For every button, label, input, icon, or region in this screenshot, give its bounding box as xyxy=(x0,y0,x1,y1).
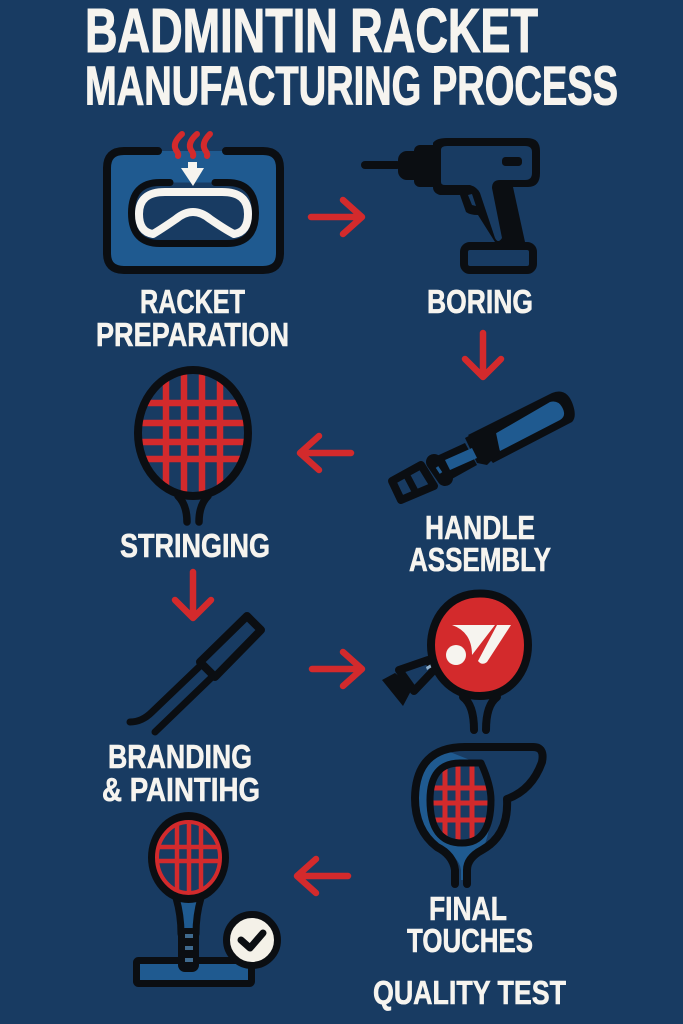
icon: power drill xyxy=(361,138,540,270)
icon: heated mould with racket frame xyxy=(107,134,280,270)
arrow: branding to red logo racket xyxy=(312,652,362,686)
arrow: preparation to boring xyxy=(311,200,362,234)
label: branding and painting xyxy=(102,738,260,808)
icon: racket handle xyxy=(392,392,575,500)
icon: racket with red logo head xyxy=(431,594,528,730)
label: racket preparation: PREPARATION xyxy=(96,316,289,353)
icon: racket shaft and grip xyxy=(130,616,261,732)
panel: branding and painting xyxy=(102,616,261,808)
label: handle assembly: HANDLE xyxy=(425,509,535,546)
label: racket preparation xyxy=(96,283,289,353)
label: final touches: TOUCHES xyxy=(407,922,533,959)
arrow: boring to handle assembly xyxy=(465,333,501,377)
panel: handle assembly xyxy=(392,392,575,578)
title xyxy=(85,0,618,116)
label: branding and painting: BRANDING xyxy=(108,738,252,775)
arrow: handle assembly to stringing xyxy=(300,436,351,470)
arrow: final touches to quality test xyxy=(297,859,348,893)
label: racket preparation: RACKET xyxy=(140,283,245,320)
arrow: stringing to branding xyxy=(175,572,211,618)
panel: racket preparation xyxy=(96,134,289,353)
panel: branded racket xyxy=(382,594,528,730)
label: handle assembly: ASSEMBLY xyxy=(409,541,551,578)
label: stringing: STRINGING xyxy=(120,527,270,564)
panel: final touches xyxy=(407,747,543,959)
panel: boring xyxy=(361,138,540,320)
label: final touches xyxy=(407,890,533,959)
icon: shuttlecock on racket xyxy=(382,660,434,706)
label: handle assembly xyxy=(409,509,551,578)
label: boring: BORING xyxy=(427,283,533,320)
label: branding and painting: & PAINTIHG xyxy=(102,771,260,808)
panel: stringing xyxy=(120,370,270,564)
icon: racket on base with check mark xyxy=(136,812,278,984)
panel: quality test xyxy=(136,812,566,1011)
label: final touches: FINAL xyxy=(429,890,507,927)
icon: strung racket xyxy=(130,370,256,522)
icon: racket head in outline xyxy=(415,747,543,884)
label: quality test: QUALITY TEST xyxy=(373,974,566,1011)
